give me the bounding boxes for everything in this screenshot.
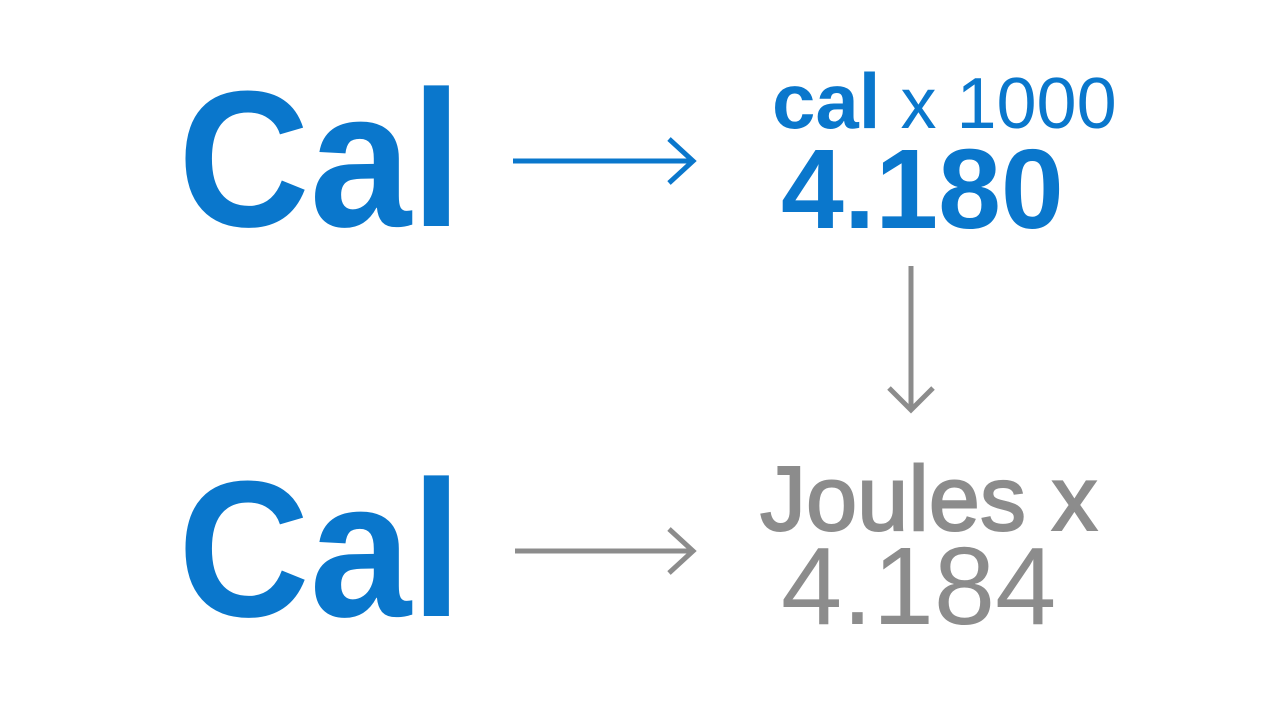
heading: Cal top: Cal (178, 51, 462, 268)
text block: Joules x: Joules x (760, 448, 1098, 550)
text block: cal x 1000: cal x 1000 (772, 57, 1117, 145)
arrow: bottom horizontal (515, 527, 696, 575)
arrow: vertical grey (887, 266, 935, 414)
number: 4.184: 4.184 (781, 525, 1056, 648)
heading: Cal bottom: Cal (178, 441, 462, 658)
number: 4.180: 4.180 (781, 126, 1064, 252)
arrow: top horizontal (513, 137, 697, 185)
